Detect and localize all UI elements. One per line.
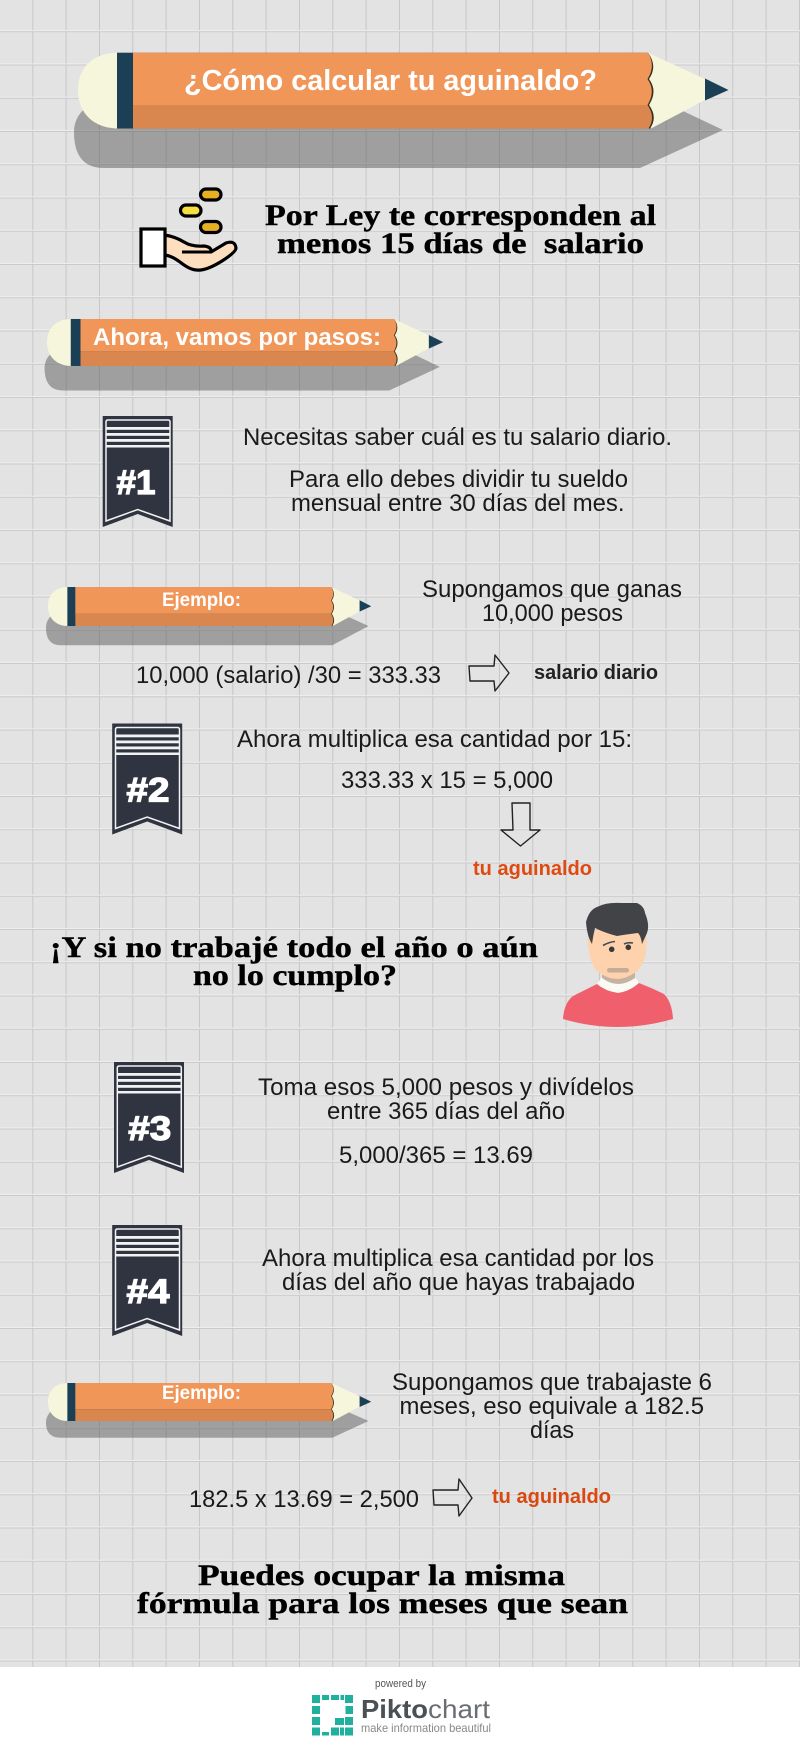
step 4 text: días del año que hayas trabajado: [282, 1269, 635, 1296]
pencil banner: ejemplo 2: [46, 1383, 371, 1438]
ejemplo label: Ejemplo:: [162, 590, 241, 611]
step 2 text: [237, 726, 632, 794]
pencil body: [133, 53, 654, 129]
arrow: to tu aguinaldo: [433, 1479, 472, 1516]
step 2 text: Ahora multiplica esa cantidad por 15:: [237, 726, 632, 753]
piktochart logo mark: [312, 1695, 353, 1736]
step 1 text: Necesitas saber cuál es tu salario diario.: [243, 424, 672, 451]
step 3 text: [258, 1074, 634, 1169]
ribbon badge 4: [112, 1225, 182, 1336]
pencil shadow: [74, 106, 723, 168]
ejemplo label: Ejemplo:: [162, 1383, 241, 1404]
step 3 text: Toma esos 5,000 pesos y divídelos: [258, 1074, 634, 1101]
ribbon badge 4: #4: [126, 1273, 170, 1311]
example 1 text: Supongamos que ganas: [422, 576, 682, 603]
example 1 text: [422, 576, 682, 627]
piktochart wordmark: Pikto: [361, 1694, 428, 1724]
collar: [597, 977, 639, 993]
step 3 text: 5,000/365 = 13.69: [339, 1142, 533, 1169]
title pencil banner: [74, 53, 728, 168]
step 4 text: Ahora multiplica esa cantidad por los: [262, 1245, 654, 1272]
ribbon badge 3: [114, 1062, 184, 1173]
arrow: to salario diario: [469, 655, 509, 691]
closing heading: [137, 1559, 628, 1620]
heading: si no trabajé todo el año: ¡Y si no trabajé todo el año o aún: [50, 931, 538, 964]
pencil eraser: [78, 53, 118, 129]
footer: piktochart: [0, 1667, 800, 1747]
example 2 text: Supongamos que trabajaste 6: [392, 1369, 712, 1396]
step 3 text: entre 365 días del año: [327, 1098, 565, 1125]
pencil banner: pasos: [45, 319, 443, 390]
pencil banner: ejemplo 1: [46, 587, 371, 645]
shirt: [563, 983, 673, 1027]
ribbon badge 3: #3: [128, 1110, 171, 1148]
step 1 text: [243, 424, 672, 517]
face: [588, 930, 647, 979]
step 1 text: mensual entre 30 días del mes.: [291, 490, 624, 517]
label: tu aguinaldo: tu aguinaldo: [473, 858, 592, 880]
pasos text: Ahora, vamos por pasos:: [93, 324, 381, 351]
label: salario diario: salario diario: [534, 662, 658, 684]
arrow: down to aguinaldo: [501, 803, 540, 846]
closing heading: fórmula para los meses que sean: [137, 1587, 628, 1620]
step 1 text: Para ello debes dividir tu sueldo: [289, 466, 628, 493]
heading: si no trabajé todo el año: no lo cumplo?: [193, 959, 397, 992]
example 1 text: 10,000 pesos: [482, 600, 623, 627]
step 4 text: [262, 1245, 654, 1296]
label: tu aguinaldo: tu aguinaldo: [492, 1486, 611, 1508]
ribbon badge 1: #1: [116, 464, 156, 502]
powered by text: powered by: [375, 1678, 426, 1690]
closing heading: Puedes ocupar la misma: [198, 1559, 565, 1592]
title text: ¿Cómo calcular tu aguinaldo?: [184, 65, 597, 97]
ribbon badge 2: [112, 724, 182, 834]
formula: salario diario: 10,000 (salario) /30 = 333.33: [136, 662, 441, 689]
formula: aguinaldo proporcional: 182.5 x 13.69 = 2,500: [189, 1486, 419, 1513]
example 2 text: [392, 1369, 712, 1444]
tagline: make information beautiful: [361, 1721, 491, 1735]
example 2 text: meses, eso equivale a 182.5: [400, 1393, 704, 1420]
step 2 text: 333.33 x 15 = 5,000: [341, 767, 553, 794]
pencil tip: [648, 53, 705, 129]
ribbon badge 1: [103, 416, 173, 527]
icon: worried man: [563, 903, 673, 1027]
example 2 text: días: [530, 1417, 574, 1444]
heading: por ley: [265, 199, 656, 260]
neck shadow: [602, 968, 635, 984]
heading: por ley: menos 15 días de salario: [277, 227, 644, 260]
footer: piktochart: chart: [428, 1694, 491, 1724]
icon: hand receiving coins: [141, 189, 236, 270]
hair: [586, 903, 648, 944]
heading: si no trabajé todo el año: [50, 931, 538, 992]
ribbon badge 2: #2: [126, 772, 170, 810]
heading: por ley: Por Ley te corresponden al: [265, 199, 656, 232]
